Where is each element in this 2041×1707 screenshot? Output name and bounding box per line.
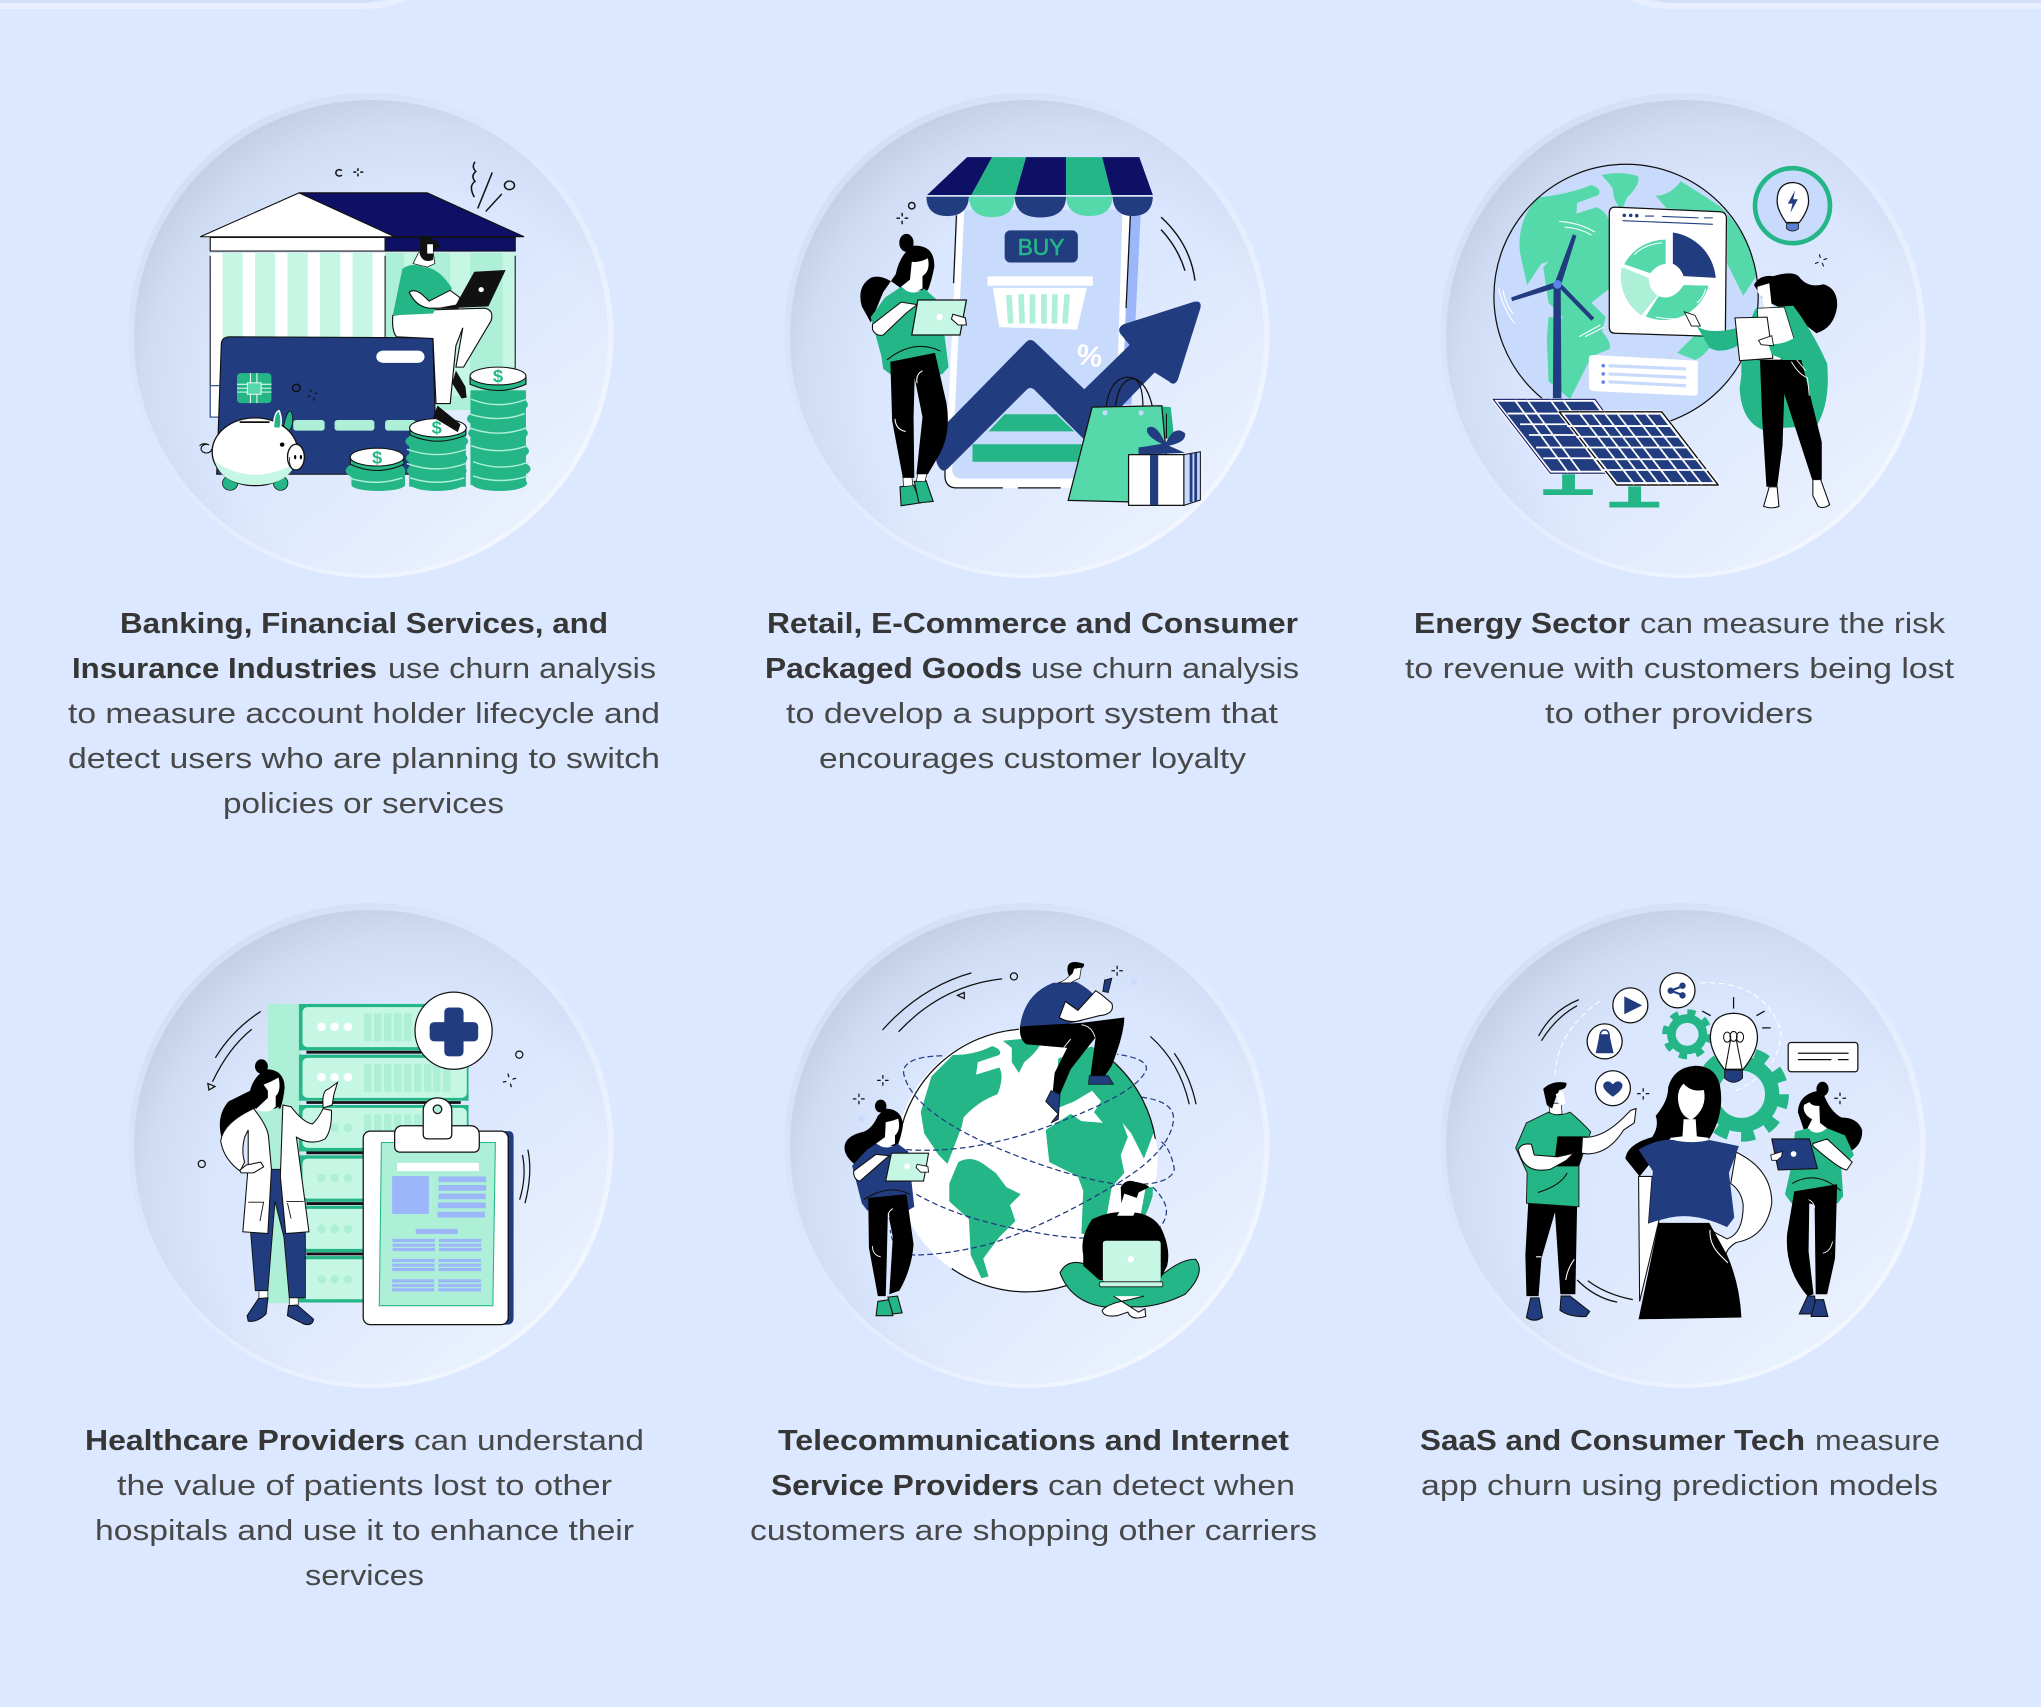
text: retail: to develop a support system that [786,698,1278,730]
text: healthcare: services [305,1560,424,1592]
illustration: doctor, server rack and clipboard [198,992,530,1325]
bank columns [210,253,515,417]
panel: saas [1420,903,1940,1502]
text: energy: to other providers [1545,698,1813,730]
coin stacks: $ [372,448,382,467]
text: banking: Insurance Industries [72,653,377,685]
note card [1589,355,1698,396]
illustration: connected globe with three people [845,962,1199,1318]
globe [1494,164,1758,429]
credit card [217,337,437,474]
text: retail: Packaged Goods [765,653,1022,685]
sparks above bank [336,162,514,211]
dish backdrop [1440,903,1926,1388]
dish backdrop [128,93,614,578]
dish backdrop [784,93,1270,578]
text: telecommunications: Telecommunications and Internet [778,1425,1289,1457]
sparkle and motion lines [896,202,1195,281]
doctor [220,1059,337,1325]
panel: retail [765,93,1299,775]
text: healthcare: the value of patients lost to other [117,1470,612,1502]
top left panel remnant [0,0,404,6]
coin stacks: $ [432,418,442,437]
man with laptop [393,236,506,432]
text: banking: detect users who are planning to switch [68,743,660,775]
dish backdrop [128,903,614,1388]
illustration: product team with gears, lightbulb and app icons [1516,973,1862,1320]
text: telecommunications: can detect when [1048,1470,1295,1502]
woman with tablet [860,234,966,506]
man on top with phone [1020,962,1124,1123]
text: healthcare: hospitals and use it to enhance their [95,1515,634,1547]
illustration: bank, card, piggy bank and coins [200,162,531,491]
clipboard [363,1098,514,1325]
text: retail: use churn analysis [1031,653,1299,685]
dashboard window [1609,207,1726,337]
bank roof [200,193,524,251]
icon: play [1613,988,1648,1023]
coin stacks: $ [493,367,503,386]
text: energy: to revenue with customers being lost [1405,653,1954,685]
woman with tablet [1771,1082,1862,1316]
panel: energy [1405,93,1954,730]
text: healthcare: can understand [414,1425,644,1457]
awning [926,157,1153,217]
growth arrow [936,301,1201,471]
shopping basket [987,276,1093,330]
dashed connection routes [890,1054,1174,1255]
text: energy [1405,608,1954,730]
panel: healthcare [85,903,644,1592]
man pointing [1516,1082,1636,1320]
text: retail: Retail, E-Commerce and Consumer [767,608,1298,640]
wind turbine [1499,221,1604,403]
accent dots [858,979,1137,1122]
woman with tablet [845,1100,929,1316]
piggy bank [200,411,304,490]
panel: telecommunications [750,903,1317,1547]
server rack [268,1004,469,1303]
globe [895,1029,1157,1292]
text: saas: measure [1815,1425,1940,1457]
text: banking: policies or services [223,788,504,820]
dish backdrop [784,903,1270,1388]
panel: banking [68,93,660,820]
icon: heart [1595,1071,1630,1106]
text: retail: encourages customer loyalty [819,743,1247,775]
medical cross badge [415,992,492,1069]
illustration: storefront phone, shopper and growth arrow [860,157,1201,506]
lightbulb badge [1755,168,1830,266]
illustration: globe, wind turbine, solar panels and analyst [1493,164,1837,508]
green bars [972,414,1083,462]
text: banking [68,608,660,820]
seated man with laptop [1060,1181,1199,1318]
text: saas: app churn using prediction models [1421,1470,1938,1502]
text: telecommunications [750,1425,1317,1547]
text: energy: Energy Sector [1414,608,1630,640]
text: banking: to measure account holder lifecycle and [68,698,660,730]
buy label [1005,230,1078,262]
shopping bag and gift [1068,377,1200,505]
text: telecommunications: Service Providers [771,1470,1039,1502]
dashed orbit [1555,983,1781,1091]
percent sign: % [1074,338,1105,374]
central woman [1625,1066,1772,1319]
text: healthcare [85,1425,644,1592]
analyst woman [1684,273,1837,508]
text: banking: Banking, Financial Services, and [120,608,608,640]
lightbulb [1710,1013,1757,1082]
sparks and arcs [198,1011,530,1203]
text: energy: can measure the risk [1640,608,1946,640]
text: saas: SaaS and Consumer Tech [1420,1425,1805,1457]
motion lines [1539,997,1846,1302]
text: healthcare: Healthcare Providers [85,1425,405,1457]
text: banking: use churn analysis [388,653,656,685]
coin stacks [346,367,531,491]
phone body [945,210,1141,488]
text: retail [765,608,1299,775]
buy label: BUY [1018,234,1065,260]
dish backdrop [1440,93,1926,578]
speech bubble [1788,1042,1858,1072]
icon: share [1660,973,1695,1008]
icon: shopping bag [1587,1024,1622,1059]
top right panel remnant [1633,0,2041,6]
solar panels [1493,399,1718,507]
motion lines and sparks [853,966,1196,1104]
text: telecommunications: customers are shopping other carriers [750,1515,1317,1547]
text: saas [1420,1425,1940,1502]
gears [1665,1012,1784,1136]
